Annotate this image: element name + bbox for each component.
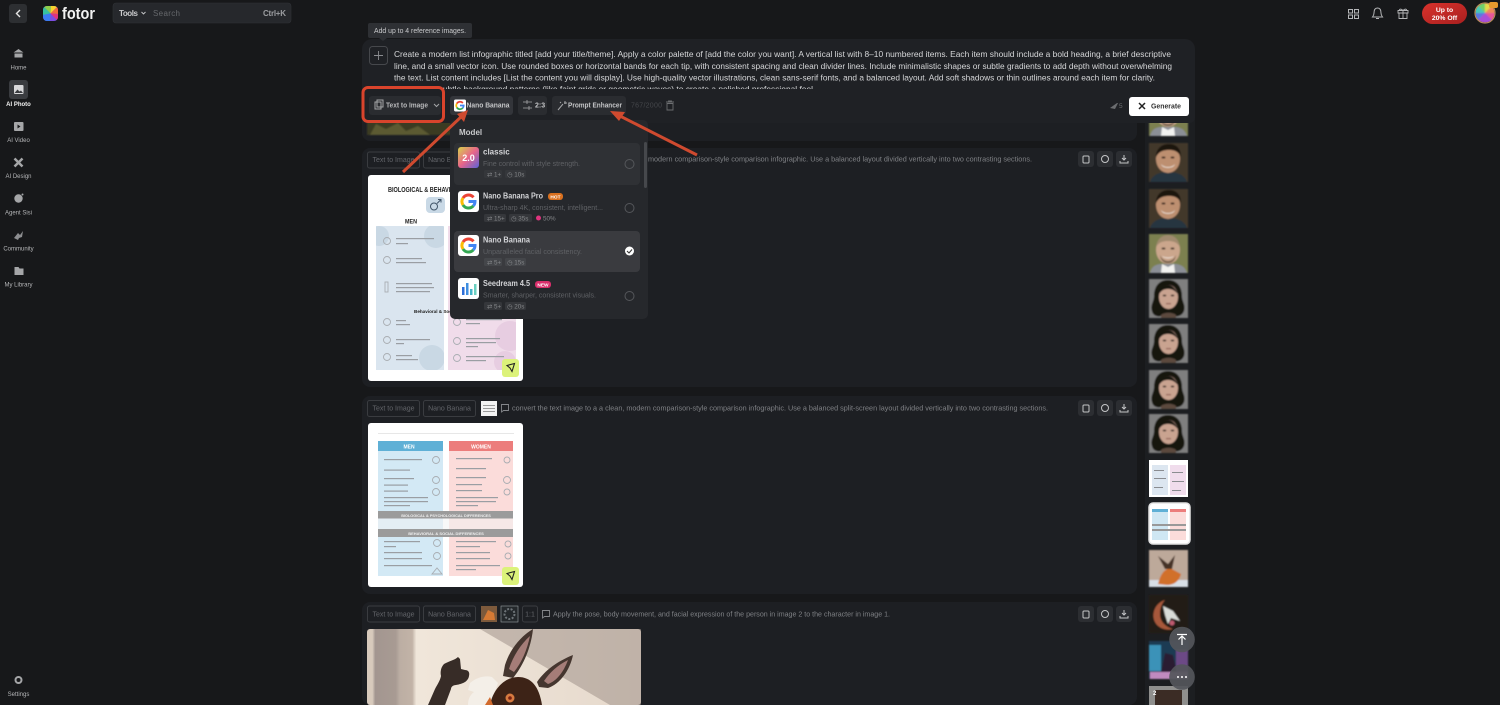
tag: Nano Banana xyxy=(424,606,476,622)
tag: Nano Banana xyxy=(424,152,476,168)
prompt text: Create a modern list infographic titled [add your title/theme]. Apply a color palette of [add the color you want]. A vertical list with 8–10 numbered items. Each item should include a bold heading, a brief descriptive xyxy=(394,49,1171,59)
column: women xyxy=(448,226,516,370)
ratio box xyxy=(522,606,538,622)
ratio box: 1:1 xyxy=(525,612,535,618)
icon: bell xyxy=(1372,8,1382,18)
search bar: Tools xyxy=(119,9,139,18)
model: Nano Banana selected: ⇄ 5+ xyxy=(487,260,502,266)
band: biological and psychological differences: BIOLOGICAL & PSYCHOLOGICAL DIFFERENCES xyxy=(401,514,491,518)
top header bar xyxy=(9,2,1498,24)
reference thumbnails xyxy=(481,606,518,622)
tag: Nano Banana: Nano Banana xyxy=(428,406,471,412)
model: Seedream 4.5: ◷ 20s xyxy=(507,304,524,310)
icon: apps grid xyxy=(1348,10,1358,18)
nav: My Library: My Library xyxy=(4,282,33,288)
column: men: MEN xyxy=(403,444,415,450)
tooltip: Add up to 4 reference images. xyxy=(374,28,466,35)
model selector: Nano Banana: Nano Banana xyxy=(466,102,510,110)
search bar xyxy=(113,3,291,23)
model: Nano Banana Pro: 50% xyxy=(543,216,556,222)
action buttons xyxy=(1078,151,1132,167)
back button xyxy=(9,4,27,23)
model: Nano Banana selected xyxy=(454,231,640,272)
model selector: Nano Banana xyxy=(450,96,513,115)
column: women: WOMEN xyxy=(471,444,491,450)
ear right xyxy=(537,655,573,688)
model: Nano Banana Pro: ⇄ 15+ xyxy=(487,216,505,222)
model: Seedream 4.5: ⇄ 5+ xyxy=(487,304,502,310)
nav: AI Photo active: AI Photo xyxy=(6,102,31,108)
subheading: behavioral: Behavioral & Social xyxy=(414,309,457,314)
nav: AI Design xyxy=(5,158,32,180)
share button xyxy=(502,359,519,377)
fotor logo xyxy=(43,6,95,21)
scrollbar xyxy=(644,142,647,188)
column heading: men: MEN xyxy=(405,220,417,226)
model: Seedream 4.5: Seedream 4.5 xyxy=(483,279,530,288)
column: men xyxy=(378,441,443,576)
tag: Text to Image: Text to Image xyxy=(372,612,415,618)
generate button: Generate xyxy=(1151,104,1181,110)
promo badge: Up to xyxy=(1436,7,1453,14)
model dropdown panel xyxy=(450,120,648,319)
nav: Agent Sisi: Agent Sisi xyxy=(5,210,32,216)
action buttons xyxy=(1078,400,1132,416)
mode selector: Text to Image xyxy=(369,96,441,115)
infographic image: comparison xyxy=(368,423,523,587)
thumbnails: women portraits xyxy=(1149,279,1188,453)
model: Nano Banana selected: Nano Banana xyxy=(483,236,531,244)
band: behavioral and social differences xyxy=(378,529,513,537)
image: rabbit-eared character xyxy=(367,629,641,705)
model: Nano Banana Pro xyxy=(458,191,634,222)
nav: Settings: Settings xyxy=(8,692,29,698)
model: classic: classic xyxy=(483,148,510,156)
band: biological and psychological differences xyxy=(378,511,513,518)
prompt text: convert the text image to a a clean, modern comparison-style comparison infographic. Use a balanced split-screen layout divided vertically into two contrasting sections. xyxy=(512,404,1048,412)
tag: Nano Banana xyxy=(424,400,476,416)
tag: Text to Image xyxy=(368,152,420,168)
ear left xyxy=(503,629,533,678)
model: Nano Banana Pro: Nano Banana Pro xyxy=(483,192,543,200)
prompt text: line, and a small vector icon. Use rounded boxes or horizontal bands for each tip, with consistent spacing and clean divider lines. Include minimalistic shapes or subtle gradients to add depth without overwhelming xyxy=(394,61,1172,71)
tag: Text to Image: Text to Image xyxy=(372,157,415,164)
scroll to top button xyxy=(1169,627,1195,652)
tag: Nano Banana: Nano Banana xyxy=(428,612,471,618)
highlight box: Text to Image xyxy=(363,88,444,122)
model: Seedream 4.5: Smarter, sharper, consistent visuals. xyxy=(483,290,596,300)
model: classic: ⇄ 1+ xyxy=(487,172,502,178)
prompt enhancer button xyxy=(552,96,626,115)
left sidebar navigation xyxy=(3,49,34,698)
column: men xyxy=(376,226,444,370)
result card: first partial row xyxy=(362,100,1137,141)
column: women xyxy=(449,441,513,576)
prompt text: Incorporate subtle background patterns (like faint grids or geometric waves) to create a polished professional feel xyxy=(394,84,813,94)
fotor logo: fotor xyxy=(62,4,95,23)
model: Seedream 4.5 xyxy=(458,278,634,310)
prompt icon xyxy=(542,610,550,618)
infographic image: biological and behavioral xyxy=(368,175,525,381)
thumbnail: orange character xyxy=(1149,550,1188,587)
dropdown heading: Model xyxy=(459,128,482,137)
nav: AI Photo active xyxy=(6,80,31,108)
thumbnail: biological infographic xyxy=(1149,460,1188,497)
thumbnail: neon city character xyxy=(1149,641,1188,679)
prompt text xyxy=(394,49,1172,94)
tag: Text to Image: Text to Image xyxy=(372,406,415,412)
nav: Community xyxy=(3,231,34,252)
infographic title: BIOLOGICAL & BEHAVIORAL xyxy=(388,187,467,194)
fur tuft xyxy=(468,676,498,705)
gender icon xyxy=(426,197,445,213)
arrow: to Nano Banana selector xyxy=(403,110,468,172)
model: classic: ◷ 10s xyxy=(507,172,524,178)
search bar: Search xyxy=(153,9,180,18)
model: classic xyxy=(454,143,640,185)
tag: Text to Image xyxy=(368,400,420,416)
nav: Agent Sisi xyxy=(5,194,32,216)
nav: Community: Community xyxy=(3,246,34,252)
thumbnail history column xyxy=(1145,97,1195,705)
credit cost xyxy=(1110,103,1123,110)
model: Nano Banana selected: Unparalleled facial consistency. xyxy=(483,247,582,256)
more options button xyxy=(1169,664,1195,690)
model: classic: 2.0 xyxy=(462,153,475,163)
thumbnail: selected comparison infographic xyxy=(1149,503,1190,544)
prompt icon xyxy=(502,404,508,412)
tag: Nano Banana: Nano Banana xyxy=(428,157,471,164)
aspect ratio selector xyxy=(518,96,547,115)
add reference button xyxy=(370,46,388,64)
mode selector: Text to Image: Text to Image xyxy=(386,102,428,110)
arrow: to Prompt Enhancer xyxy=(610,111,697,155)
nav: Home: Home xyxy=(10,66,27,72)
thumbnail: grouped set xyxy=(1149,686,1188,705)
user avatar xyxy=(1475,2,1498,23)
tooltip xyxy=(368,23,472,41)
result card: pose transfer xyxy=(362,602,1137,705)
model: Nano Banana Pro: ◷ 35s xyxy=(511,216,528,222)
share button xyxy=(502,567,519,585)
search bar: Ctrl+K xyxy=(263,9,286,18)
credit cost: 5 xyxy=(1119,103,1123,110)
tag: Text to Image xyxy=(368,606,420,622)
thumbnail: dark swirl character xyxy=(1149,595,1188,633)
head xyxy=(490,677,542,705)
nav: AI Video: AI Video xyxy=(7,138,30,144)
model: Seedream 4.5: NEW xyxy=(537,283,549,289)
icon: trash xyxy=(666,101,674,110)
nav: AI Design: AI Design xyxy=(5,174,32,180)
prompt text: modern comparison-style comparison infographic. Use a balanced layout divided vertically into two contrasting sections. xyxy=(648,154,1032,164)
nav: Home xyxy=(10,49,27,72)
nav: My Library xyxy=(4,267,33,288)
generate button xyxy=(1129,97,1189,116)
character counter: 767/2000 xyxy=(631,102,662,110)
thumbnail: grouped set: 2 xyxy=(1153,691,1157,697)
model: classic: Fine control with style strength. xyxy=(483,159,580,168)
fist and arm xyxy=(428,657,469,705)
promo badge xyxy=(1422,3,1467,24)
prompt composer panel xyxy=(362,23,1195,123)
model: Nano Banana Pro: HOT xyxy=(550,195,561,201)
partial result image xyxy=(367,118,457,135)
result card: comparison infographic xyxy=(362,396,1137,594)
promo badge: 20% Off xyxy=(1432,15,1458,22)
reference thumbnail xyxy=(481,401,497,416)
result card: biological and behavioral infographic xyxy=(362,148,1137,387)
nav: Settings xyxy=(8,677,29,698)
action buttons xyxy=(1078,606,1132,622)
nav: AI Video xyxy=(7,122,30,144)
band: behavioral and social differences: BEHAVIORAL & SOCIAL DIFFERENCES xyxy=(408,531,484,536)
prompt enhancer button: Prompt Enhancer xyxy=(568,102,622,110)
model: Nano Banana Pro: Ultra-sharp 4K, consistent, intelligent... xyxy=(483,203,603,212)
model: Nano Banana selected: ◷ 15s xyxy=(507,260,524,266)
prompt text: Apply the pose, body movement, and facial expression of the person in image 2 to the character in image 1. xyxy=(553,610,890,618)
aspect ratio selector: 2:3 xyxy=(535,102,545,110)
icon: gift xyxy=(1398,9,1408,18)
prompt text: the text. List content includes [List the content you will display]. Use high-quality vector illustrations, clean sans-serif fonts, and a balanced layout. Add soft shadows or thin outlines around each item for clarity. xyxy=(394,72,1155,82)
thumbnails: men portraits xyxy=(1149,97,1188,273)
